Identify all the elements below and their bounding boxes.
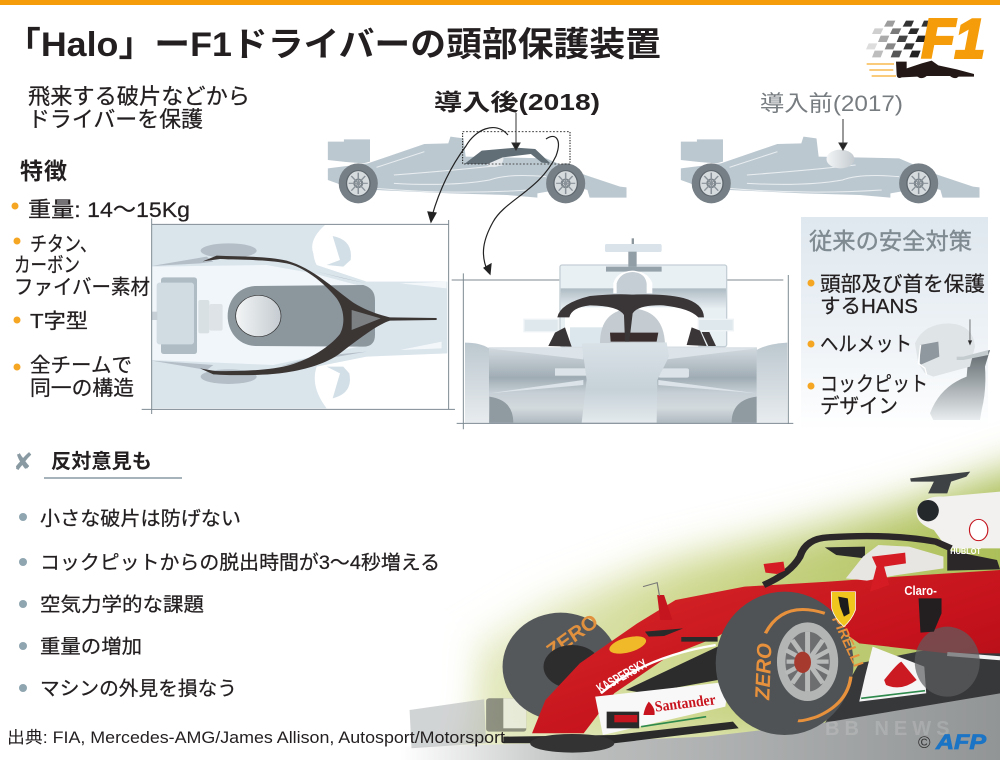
opening xyxy=(565,307,698,347)
opposition list xyxy=(19,508,440,700)
frame xyxy=(142,218,455,414)
mirrors xyxy=(524,319,733,332)
halo side xyxy=(464,148,550,164)
heading underline xyxy=(44,477,182,479)
features list xyxy=(12,158,190,400)
helmet xyxy=(826,150,854,168)
item: cockpit design: デザイン xyxy=(820,395,898,418)
far suspension xyxy=(544,645,601,688)
item 5: マシンの外見を損なう xyxy=(40,678,237,700)
intro text: ドライバーを保護 xyxy=(28,107,203,132)
icon: speed lines xyxy=(867,64,896,76)
front wing white panel xyxy=(595,682,729,735)
rim xyxy=(777,622,838,701)
rim spokes xyxy=(786,632,829,692)
item 4: 重量の増加 xyxy=(40,636,142,658)
dotted floor xyxy=(915,627,980,697)
prancing horse xyxy=(838,597,850,617)
sidepod white panel xyxy=(859,647,926,702)
cockpit surround xyxy=(152,265,373,365)
Santander text: Santander xyxy=(653,690,717,715)
sidepod logo xyxy=(884,662,917,687)
icon: helmet and HANS xyxy=(915,319,990,420)
green stripe xyxy=(641,717,706,727)
frame xyxy=(452,273,793,429)
label: after 2018: 導入後(2018) xyxy=(434,89,600,115)
Claro sponsor: Claro- xyxy=(904,584,937,599)
engine cover xyxy=(152,277,223,354)
nose xyxy=(582,342,669,423)
dotted highlight box xyxy=(463,132,570,164)
sidepod stripe xyxy=(861,691,925,698)
halo front view xyxy=(548,294,716,347)
tyre lettering P ZERO: ZERO xyxy=(751,643,777,701)
side view car without halo xyxy=(681,137,980,203)
driver helmet xyxy=(846,545,943,581)
halo rear pylon xyxy=(947,550,1000,571)
feature: same structure: 同一の構造 xyxy=(30,377,134,400)
panel: conventional safety measures xyxy=(801,217,990,430)
front suspension shapes xyxy=(327,236,351,398)
item: HANS: 頭部及び首を保護 xyxy=(820,273,985,296)
far front tyre xyxy=(503,613,619,721)
lower front wing xyxy=(503,722,739,743)
grass background xyxy=(385,457,1000,760)
airbox inlet xyxy=(917,500,939,521)
feature: material: チタン、 xyxy=(30,233,97,256)
wing highlights xyxy=(488,347,757,393)
ghost wing at left xyxy=(410,698,526,748)
T wing xyxy=(910,472,970,493)
feature: material: ファイバー素材 xyxy=(14,276,150,299)
side view car with halo xyxy=(328,132,627,203)
icon: checkered flag xyxy=(866,21,933,57)
AFP copyright: © xyxy=(918,733,931,752)
hub xyxy=(794,652,811,673)
top view diagram xyxy=(142,218,455,414)
title: 「Halo」ーF1ドライバーの頭部保護装置 xyxy=(5,26,661,64)
curved arrow to front view xyxy=(483,136,558,274)
Santander flame xyxy=(643,702,655,715)
rear wing xyxy=(560,238,727,347)
intro text: 飛来する破片などから xyxy=(28,84,250,109)
engine cover xyxy=(916,492,1000,548)
sidepods xyxy=(152,243,367,384)
heading: features: 特徴 xyxy=(20,158,67,184)
top view body xyxy=(152,225,447,408)
tyre lettering PIRELLI: PIRELLI xyxy=(829,614,866,669)
watermark: BB NEWS xyxy=(825,718,954,740)
front wing brake detail xyxy=(607,712,639,728)
underbody shadow xyxy=(626,647,718,693)
source credit: 出典: FIA, Mercedes-AMG/James Allison, Autosport/Motorsport xyxy=(7,728,505,747)
item 1: 小さな破片は防げない xyxy=(40,508,241,530)
AFP copyright: AFP xyxy=(935,731,987,754)
arrow: down to helmet xyxy=(839,119,847,150)
label: before 2017: 導入前(2017) xyxy=(760,91,903,116)
airbox xyxy=(613,271,652,293)
front view diagram xyxy=(452,238,793,429)
yellow shell logo xyxy=(607,633,649,657)
car body xyxy=(488,347,757,423)
item: helmet: ヘルメット xyxy=(820,333,912,356)
curved arrow to top view xyxy=(428,128,508,222)
dark headrest bar xyxy=(825,547,865,558)
car body red xyxy=(532,570,1000,733)
helmet xyxy=(600,308,665,343)
camera mounts xyxy=(643,583,718,639)
feature: weight: 重量: 14〜15Kg xyxy=(28,198,190,222)
rear body white stripe xyxy=(947,654,1000,658)
intro text xyxy=(28,84,250,132)
icon: cross mark: ✘ xyxy=(13,448,33,476)
feature: T shape: T字型 xyxy=(30,310,88,333)
track xyxy=(400,693,1000,760)
arrow: down to halo xyxy=(512,113,520,150)
mirrors xyxy=(764,553,906,592)
rear floor and dark lower body xyxy=(821,650,1000,730)
far tyre ZERO lettering: ZERO xyxy=(540,611,604,662)
side pods xyxy=(465,343,787,423)
halo inner triangle xyxy=(352,310,381,330)
icon: car silhouette xyxy=(896,61,974,78)
wheels xyxy=(489,397,757,423)
feature: material xyxy=(14,233,150,299)
panel heading: 従来の安全対策 xyxy=(809,228,972,254)
heading text: 反対意見も xyxy=(51,450,152,473)
item: cockpit design: コックピット xyxy=(820,373,928,396)
Ferrari shield xyxy=(831,592,855,627)
helmet xyxy=(484,150,503,167)
white nose stripe xyxy=(601,645,716,693)
helmet xyxy=(236,295,281,337)
item: cockpit design xyxy=(808,373,928,418)
AFP copyright xyxy=(918,731,987,754)
photo: Ferrari with halo xyxy=(320,457,1000,760)
cockpit xyxy=(228,285,375,347)
front tyre xyxy=(716,592,853,735)
item 3: 空気力学的な課題 xyxy=(40,594,204,616)
nose sponsor: KASPERSKY xyxy=(594,657,652,696)
top orange bar xyxy=(0,0,1000,5)
halo top view xyxy=(200,256,437,375)
item 2: コックピットからの脱出時間が3〜4秒増える xyxy=(40,552,440,574)
feature: same structure xyxy=(14,354,134,400)
F1 logo xyxy=(866,7,985,78)
opposition heading xyxy=(13,448,182,478)
item: HANS: するHANS xyxy=(820,295,918,318)
E badge xyxy=(969,519,988,541)
sidepod inlet xyxy=(919,598,942,633)
orange tyre lines xyxy=(765,610,851,721)
feature: same structure: 全チームで xyxy=(30,354,132,377)
icon: F1 letters: F1 xyxy=(922,7,985,69)
feature: material: カーボン xyxy=(14,254,80,277)
white fade xyxy=(320,583,473,760)
halo arm xyxy=(764,536,951,585)
panel background xyxy=(801,217,988,430)
nose highlights xyxy=(400,282,447,350)
item: HANS xyxy=(808,273,985,318)
HUBLOT text: HUBLOT xyxy=(950,547,982,556)
